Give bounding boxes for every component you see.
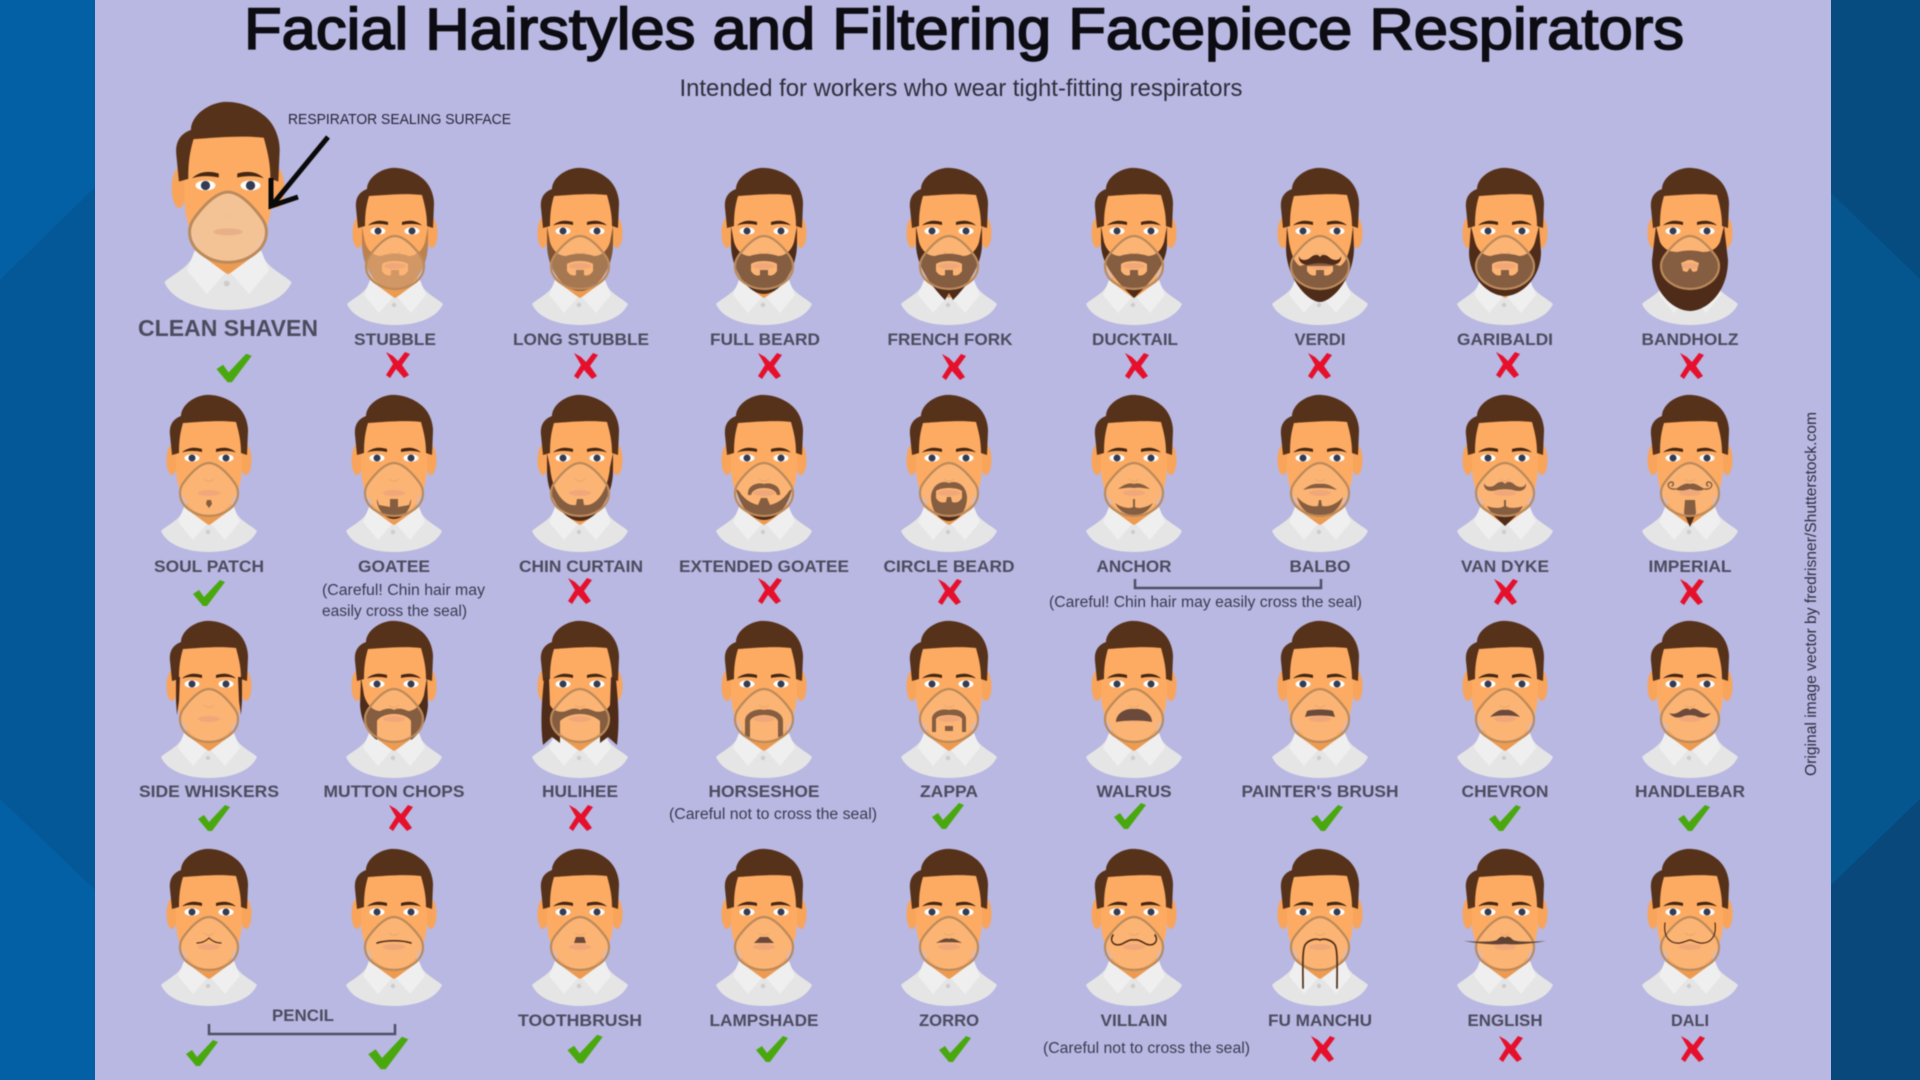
portrait: verdi: [1272, 168, 1368, 379]
verdi label: VERDI: [1294, 330, 1346, 349]
check mark: [1489, 805, 1521, 831]
blue background right: [1831, 0, 1920, 1080]
zappa label: ZAPPA: [920, 782, 978, 801]
portrait: chin curtain: [519, 395, 643, 604]
long stubble label: LONG STUBBLE: [513, 330, 649, 349]
portrait: horseshoe: [669, 621, 877, 823]
fu manchu head: [1272, 849, 1368, 1006]
cross mark: [1496, 352, 1520, 378]
verdi head: [1272, 168, 1368, 325]
check mark: [193, 580, 225, 606]
side whiskers head: [161, 621, 257, 778]
check mark: [1311, 805, 1343, 831]
portrait: lampshade: [710, 849, 818, 1062]
side whiskers label: SIDE WHISKERS: [139, 782, 279, 801]
check mark: [216, 354, 252, 382]
check mark: [756, 1036, 788, 1062]
portrait: garibaldi: [1457, 168, 1553, 378]
portrait: stubble: [347, 168, 443, 378]
portrait: zorro: [901, 849, 997, 1062]
villain caution note: (Careful not to cross the seal): [1043, 1040, 1250, 1057]
check mark: [1678, 805, 1710, 831]
extended goatee head: [716, 395, 812, 552]
french fork head: [901, 168, 997, 325]
portrait: full beard: [710, 168, 820, 379]
dali head: [1642, 849, 1738, 1006]
cross mark: [1680, 579, 1704, 605]
clean shaven head: [164, 102, 292, 310]
handlebar head: [1642, 621, 1738, 778]
portrait: long stubble: [513, 168, 649, 379]
garibaldi label: GARIBALDI: [1457, 330, 1553, 349]
portrait: balbo: [1272, 395, 1368, 576]
check mark: [198, 805, 230, 831]
portrait: fu manchu: [1268, 849, 1372, 1062]
full beard head: [716, 168, 812, 325]
ducktail head: [1086, 168, 1182, 325]
circle beard head: [901, 395, 997, 552]
portrait: french fork: [888, 168, 1013, 380]
portrait: imperial: [1642, 395, 1738, 605]
portrait: hulihee: [532, 621, 628, 831]
anchor head: [1086, 395, 1182, 552]
check mark: [1114, 803, 1146, 829]
portrait: goatee: [322, 395, 485, 620]
check mark: [186, 1040, 218, 1066]
zappa head: [901, 621, 997, 778]
soul patch head: [161, 395, 257, 552]
chin curtain head: [532, 395, 628, 552]
handlebar label: HANDLEBAR: [1635, 782, 1745, 801]
portrait: chevron: [1457, 621, 1553, 831]
fu manchu label: FU MANCHU: [1268, 1011, 1372, 1030]
arrow to sealing surface: [271, 137, 328, 206]
callout: respirator sealing surface label: RESPIRATOR SEALING SURFACE: [288, 111, 511, 128]
villain label: VILLAIN: [1100, 1011, 1168, 1030]
zorro head: [901, 849, 997, 1006]
chevron head: [1457, 621, 1553, 778]
cross mark: [938, 579, 962, 605]
portrait: handlebar: [1635, 621, 1745, 831]
chin curtain label: CHIN CURTAIN: [519, 557, 643, 576]
anchor and balbo caution note: (Careful! Chin hair may easily cross the seal): [1049, 594, 1362, 611]
mutton chops head: [346, 621, 442, 778]
french fork label: FRENCH FORK: [888, 330, 1013, 349]
goatee caution note: (Careful! Chin hair may: [322, 582, 485, 599]
portrait: painter's brush: [1242, 621, 1398, 831]
goatee caution note: easily cross the seal): [322, 603, 467, 620]
pencil moustache head: [161, 849, 257, 1006]
portrait: mutton chops: [324, 621, 464, 831]
hulihee label: HULIHEE: [542, 782, 618, 801]
clean shaven label: CLEAN SHAVEN: [138, 315, 318, 341]
english label: ENGLISH: [1468, 1011, 1542, 1030]
image credit: Original image vector by fredrisner/Shutterstock.com: [1803, 412, 1820, 776]
dali label: DALI: [1671, 1011, 1709, 1030]
bandholz label: BANDHOLZ: [1642, 330, 1738, 349]
chevron label: CHEVRON: [1462, 782, 1548, 801]
check mark: [568, 1035, 603, 1063]
portrait: walrus: [1086, 621, 1182, 829]
ducktail label: DUCKTAIL: [1092, 330, 1178, 349]
hulihee head: [532, 621, 628, 778]
soul patch label: SOUL PATCH: [154, 557, 264, 576]
horseshoe label: HORSESHOE: [708, 782, 820, 801]
stubble label: STUBBLE: [354, 330, 436, 349]
circle beard label: CIRCLE BEARD: [884, 557, 1014, 576]
cross mark: [1125, 353, 1149, 379]
walrus label: WALRUS: [1096, 782, 1172, 801]
portrait: extended goatee: [679, 395, 849, 604]
portrait: villain: [1043, 849, 1250, 1057]
cross mark: [574, 353, 598, 379]
portrait: soul patch: [154, 395, 264, 606]
walrus head: [1086, 621, 1182, 778]
extended goatee label: EXTENDED GOATEE: [679, 557, 849, 576]
portrait: circle beard: [884, 395, 1014, 605]
cross mark: [568, 578, 592, 604]
imperial head: [1642, 395, 1738, 552]
check mark: [368, 1037, 408, 1069]
villain head: [1086, 849, 1182, 1006]
cross mark: [1499, 1036, 1523, 1062]
cross mark: [386, 352, 410, 378]
portrait: zappa: [901, 621, 997, 829]
horseshoe head: [716, 621, 812, 778]
anchor label: ANCHOR: [1096, 557, 1172, 576]
van dyke head: [1457, 395, 1553, 552]
pencil moustache head: [346, 849, 442, 1006]
blue background left: [0, 0, 95, 1080]
balbo label: BALBO: [1290, 557, 1350, 576]
portrait: bandholz: [1642, 168, 1738, 379]
cross mark: [758, 578, 782, 604]
stubble head: [347, 168, 443, 325]
horseshoe caution note: (Careful not to cross the seal): [669, 806, 877, 823]
painter's brush label: PAINTER'S BRUSH: [1242, 782, 1398, 801]
painter's brush head: [1272, 621, 1368, 778]
portrait: van dyke: [1457, 395, 1553, 605]
pencil bracket: [209, 1024, 395, 1034]
van dyke label: VAN DYKE: [1461, 557, 1549, 576]
portrait: dali: [1642, 849, 1738, 1062]
cross mark: [569, 805, 593, 831]
cross mark: [389, 805, 413, 831]
check mark: [932, 803, 964, 829]
full beard label: FULL BEARD: [710, 330, 820, 349]
pencil label: PENCIL: [272, 1006, 334, 1025]
check mark: [939, 1036, 971, 1062]
lampshade label: LAMPSHADE: [710, 1011, 818, 1030]
bandholz head: [1642, 168, 1738, 325]
cross mark: [1681, 1036, 1705, 1062]
cross mark: [942, 354, 966, 380]
zorro label: ZORRO: [919, 1011, 979, 1030]
toothbrush head: [532, 849, 628, 1006]
toothbrush label: TOOTHBRUSH: [518, 1011, 642, 1030]
lampshade head: [716, 849, 812, 1006]
portrait: clean shaven: [138, 102, 318, 382]
cross mark: [1308, 353, 1332, 379]
portrait: anchor: [1086, 395, 1182, 576]
portrait: english: [1457, 849, 1553, 1062]
long stubble head: [532, 168, 628, 325]
anchor and balbo bracket: [1135, 579, 1321, 588]
portrait: side whiskers: [139, 621, 279, 831]
goatee label: GOATEE: [358, 557, 430, 576]
cross mark: [758, 353, 782, 379]
portrait: pencil variant one: [161, 849, 257, 1066]
portrait: toothbrush: [518, 849, 642, 1063]
garibaldi head: [1457, 168, 1553, 325]
english head: [1457, 849, 1553, 1006]
cross mark: [1311, 1036, 1335, 1062]
subtitle: Intended for workers who wear tight-fitting respirators: [680, 75, 1242, 102]
portrait: pencil variant two: [346, 849, 442, 1069]
cross mark: [1494, 579, 1518, 605]
imperial label: IMPERIAL: [1648, 557, 1732, 576]
goatee head: [346, 395, 442, 552]
mutton chops label: MUTTON CHOPS: [324, 782, 464, 801]
balbo head: [1272, 395, 1368, 552]
portrait: ducktail: [1086, 168, 1182, 379]
cross mark: [1680, 353, 1704, 379]
